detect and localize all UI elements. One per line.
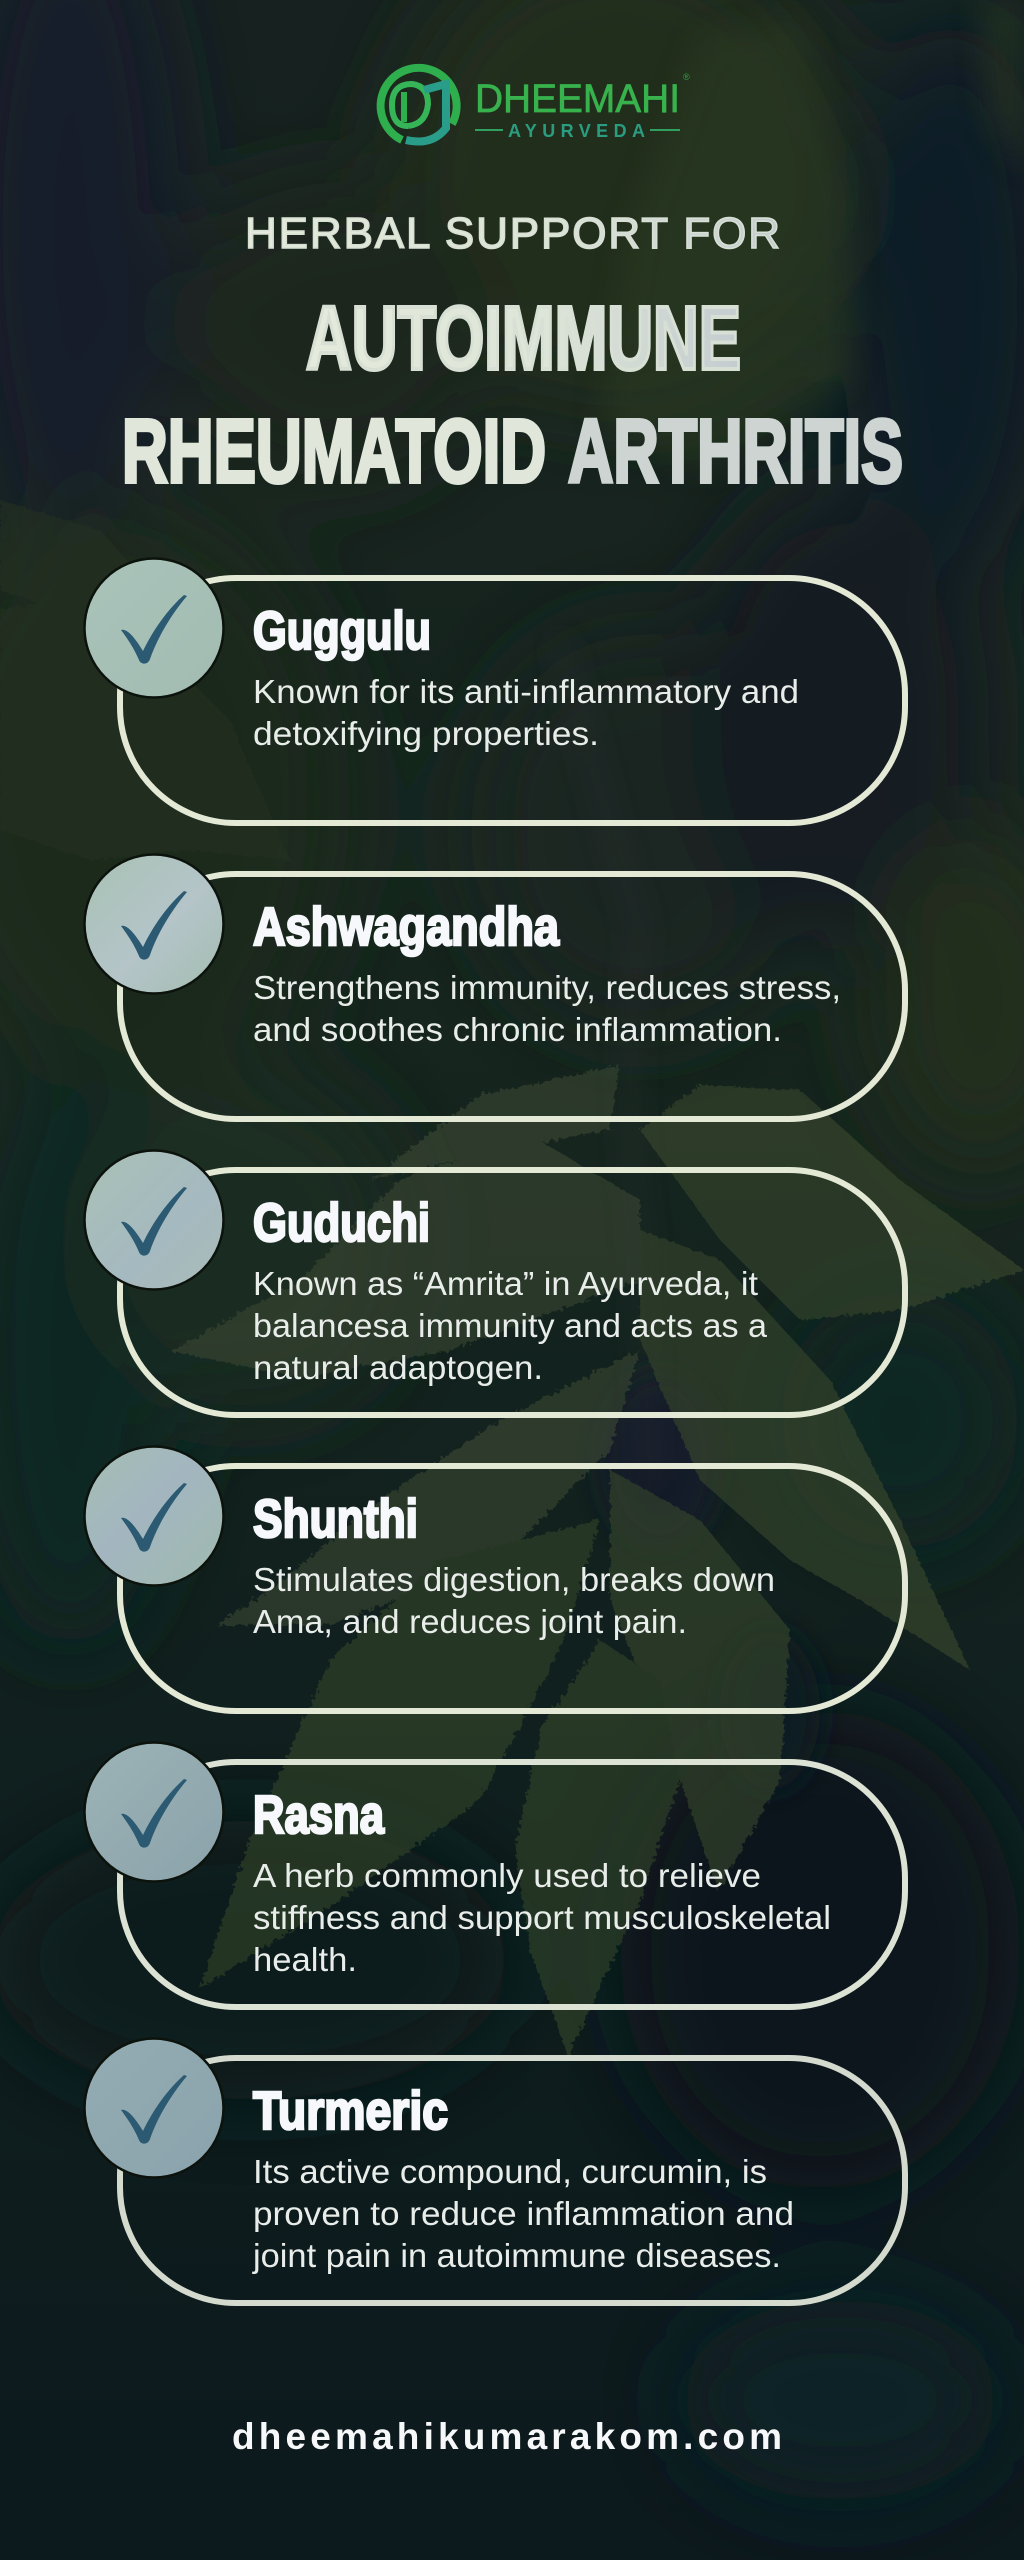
logo tagline: AYURVEDA [508,121,645,141]
dark gaps behind the central branch [600,1370,820,1790]
description [253,673,799,752]
logo wordmark: DHEEMAHI [475,77,680,121]
panel: Turmeric [84,2038,905,2303]
title: autoimmune: AUTOIMMUNE [306,289,741,389]
description: balancesa immunity and acts as a [253,1307,768,1344]
description [253,1561,775,1640]
pill outline [120,874,905,1119]
herb name: Guggulu [253,601,431,661]
description: health. [253,1941,357,1978]
panel: Rasna [84,1742,905,2007]
description [253,969,841,1048]
icon: check circle [84,1150,224,1290]
description: Ama, and reduces joint pain. [253,1603,687,1640]
icon: check circle [84,1742,224,1882]
pill outline [120,1466,905,1711]
heading: herbal support for: HERBAL SUPPORT FOR [245,209,780,258]
website footer: dheemahikumarakom.com [232,2416,782,2457]
dim blurred leaf at top [600,0,1024,470]
description: joint pain in autoimmune diseases. [252,2237,781,2274]
description: A herb commonly used to relieve [253,1857,761,1894]
description: proven to reduce inflammation and [253,2195,794,2232]
description: natural adaptogen. [253,1349,543,1386]
panel: Shunthi [84,1446,905,1711]
panel: Guduchi [84,1150,905,1415]
branch [560,640,650,1480]
icon: check circle [84,2038,224,2178]
description [252,2153,794,2274]
herb name: Ashwagandha [253,897,560,957]
panel: Ashwagandha [84,854,905,1119]
description [253,1265,768,1386]
pill outline [120,1170,905,1415]
pill outline [120,2058,905,2303]
herb name: Rasna [253,1785,385,1845]
herb name: Shunthi [253,1489,418,1549]
description: Stimulates digestion, breaks down [253,1561,775,1598]
description: stiffness and support musculoskeletal [253,1899,831,1936]
leaf cluster centre [171,1065,1024,2056]
logo: Dheemahi Ayurveda [381,68,690,142]
title: rheumatoid arthritis: RHEUMATOID [122,402,546,502]
pill outline [120,1762,905,2007]
description: Known as “Amrita” in Ayurveda, it [253,1265,758,1302]
description: Its active compound, curcumin, is [253,2153,767,2190]
description [253,1857,831,1978]
panel: Guggulu [84,558,905,823]
herb name: Turmeric [253,2081,448,2141]
logo registered mark: ® [683,72,690,82]
logo emblem [381,68,457,142]
description: Strengthens immunity, reduces stress, [253,969,841,1006]
icon: check circle [84,1446,224,1586]
leaf cluster upper left [0,500,290,860]
icon: check circle [84,854,224,994]
description: Known for its anti-inflammatory and [253,673,799,710]
herb name: Guduchi [253,1193,430,1253]
icon: check circle [84,558,224,698]
description: detoxifying properties. [253,715,599,752]
description: and soothes chronic inflammation. [253,1011,782,1048]
pill outline [120,578,905,823]
